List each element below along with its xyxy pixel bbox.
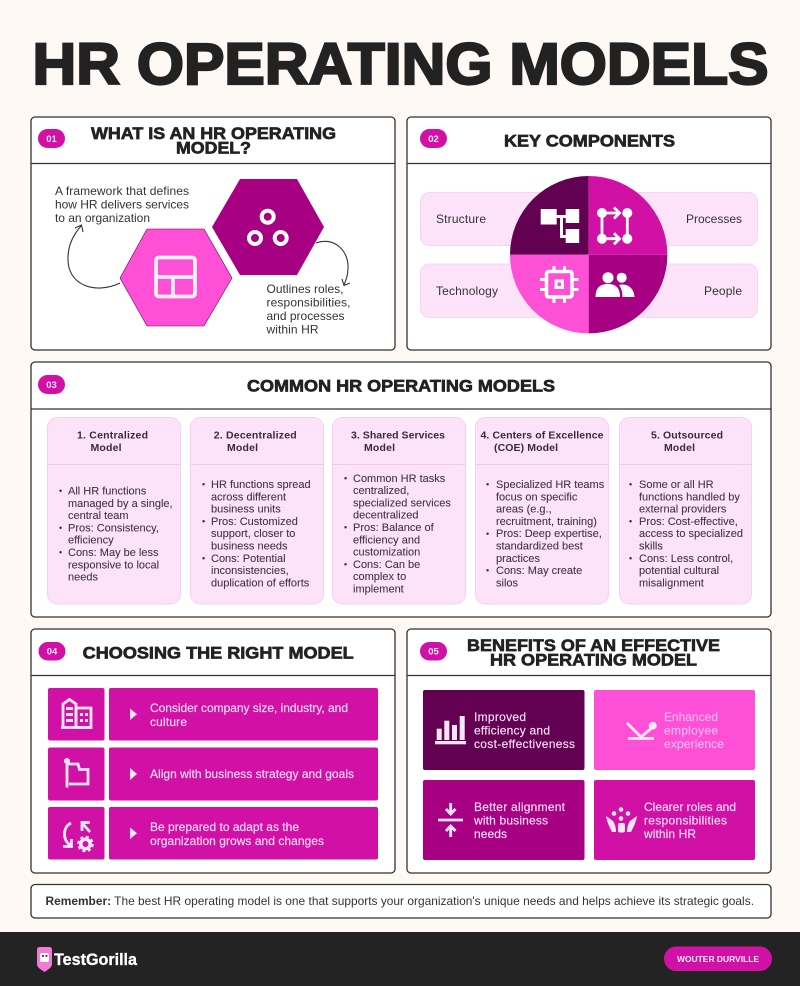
card: outsourced model: misalignment [639, 577, 704, 589]
badge 02 [420, 129, 447, 148]
card: centralized model: Pros: Consistency, [68, 522, 159, 534]
logo: TestGorilla: TestGorilla [54, 951, 138, 969]
card: outsourced model [620, 418, 752, 604]
panel: choosing the right model [31, 629, 395, 873]
text: framework definition: to an organization [55, 211, 150, 225]
tile: improved efficiency: efficiency and [474, 724, 550, 738]
icon: bar chart [435, 716, 466, 744]
footer [0, 932, 800, 986]
heading: what is an HR operating model: MODEL? [176, 140, 251, 158]
panel: benefits of an effective HR operating model [407, 629, 771, 873]
badge 04 [38, 642, 66, 660]
badge 03: 03 [46, 380, 57, 391]
card: centralized model: All HR functions [68, 486, 147, 498]
tile: enhanced employee experience [594, 690, 755, 770]
row: be prepared to adapt: organization grows and changes [150, 834, 324, 848]
card: decentralized model: Pros: Customized [211, 516, 298, 528]
card: centers of excellence model: 4. Centers of Excellence [480, 430, 604, 442]
row: be prepared to adapt: Be prepared to adapt as the [150, 820, 299, 834]
tile: enhanced employee experience: experience [664, 737, 724, 751]
card: centers of excellence model: areas (e.g., [496, 504, 552, 516]
card: decentralized model: across different [211, 491, 286, 503]
card: centralized model: responsive to local [68, 559, 159, 571]
card: centers of excellence model: practices [496, 553, 541, 565]
tile: better alignment: needs [474, 827, 507, 841]
heading: benefits: BENEFITS OF AN EFFECTIVE [467, 637, 720, 655]
card: centers of excellence model: recruitment, training) [496, 516, 597, 528]
card: decentralized model: Cons: Potential [211, 553, 286, 565]
panel: common HR operating models [31, 362, 771, 617]
card: centers of excellence model: • [486, 566, 489, 576]
heading: what is an HR operating model [91, 125, 336, 158]
panel: key components [407, 117, 771, 350]
row: business strategy [109, 748, 378, 800]
card: decentralized model [190, 418, 324, 604]
badge 01 [38, 129, 65, 148]
text: framework definition: how HR delivers services [55, 198, 189, 212]
tile: better alignment: with business [473, 814, 548, 828]
card: shared services model: Common HR tasks [353, 473, 446, 485]
card: shared services model: • [344, 523, 347, 533]
card: outsourced model: access to specialized [639, 528, 743, 540]
card: decentralized model: • [202, 480, 205, 490]
card: shared services model: Cons: Can be [353, 559, 420, 571]
panel: what is an HR operating model [31, 117, 395, 350]
heading: benefits [467, 637, 720, 670]
card: centers of excellence model: (COE) Model [494, 442, 558, 454]
card: shared services model: implement [353, 584, 404, 596]
card: centers of excellence model: • [486, 529, 489, 539]
card: outsourced model: potential cultural [639, 565, 719, 577]
pie: four quadrants [510, 176, 667, 333]
card: shared services model: customization [353, 547, 420, 559]
card: decentralized model: business units [211, 504, 281, 516]
text: framework definition [55, 184, 189, 225]
icon: alignment arrows [438, 803, 463, 837]
card: outsourced model: external providers [639, 504, 727, 516]
tile: enhanced employee experience: employee [664, 724, 718, 738]
icon: chip [540, 266, 578, 303]
arrow: to framework text [68, 225, 120, 288]
card: outsourced model: Some or all HR [639, 479, 714, 491]
card: decentralized model: • [202, 553, 205, 563]
badge 04: 04 [47, 646, 58, 658]
card: decentralized model: duplication of efforts [211, 577, 310, 589]
tile: enhanced employee experience: Enhanced [664, 710, 718, 724]
card: shared services model [332, 418, 466, 604]
row: be prepared to adapt [109, 807, 378, 860]
heading: choosing the right model: CHOOSING THE RIGHT MODEL [83, 644, 354, 662]
icon: dark hexagon with three circles [212, 179, 324, 275]
card: outsourced model: • [629, 516, 632, 526]
card: centralized model: needs [68, 572, 98, 584]
card: decentralized model: HR functions spread [211, 479, 311, 491]
card: outsourced model: skills [639, 540, 663, 552]
pill: technology and people: People [704, 284, 742, 298]
card: outsourced model: Model [664, 442, 695, 454]
heading: key components: KEY COMPONENTS [504, 132, 675, 150]
card: centralized model: • [59, 486, 62, 496]
pill: structure and processes: Structure [436, 212, 486, 226]
icon: people [596, 272, 634, 297]
card: centralized model: • [59, 523, 62, 533]
text: outlines roles: Outlines roles, [266, 282, 344, 296]
card: outsourced model: • [629, 480, 632, 490]
icon: processes [598, 208, 632, 244]
card: centers of excellence model: Pros: Deep expertise, [496, 528, 602, 540]
tile: improved efficiency: cost-effectiveness [474, 737, 575, 751]
card: shared services model: • [344, 473, 347, 483]
card: shared services model: • [344, 560, 347, 570]
card: outsourced model: 5. Outsourced [651, 430, 723, 442]
card: shared services model: 3. Shared Services [351, 430, 445, 442]
card: centralized model: Model [90, 442, 122, 454]
card: centralized model: managed by a single, [68, 498, 173, 510]
card: decentralized model: business needs [211, 540, 288, 552]
badge 05 [420, 642, 447, 660]
icon: structure [541, 209, 579, 243]
tile: clearer roles: Clearer roles and [644, 800, 736, 814]
card: shared services model: decentralized [353, 510, 418, 522]
badge 01: 01 [46, 134, 57, 145]
text: outlines roles: and processes [266, 309, 344, 323]
tile: improved efficiency [423, 690, 584, 770]
card: centralized model: Cons: May be less [68, 547, 159, 559]
row: company size [109, 688, 378, 740]
pill: author [664, 946, 772, 971]
card: centers of excellence model: focus on specific [496, 491, 578, 503]
card: decentralized model: support, closer to [211, 528, 295, 540]
card: decentralized model: inconsistencies, [211, 565, 289, 577]
tile: clearer roles [594, 780, 755, 860]
icon: hands and people [606, 807, 637, 832]
card: shared services model: Model [364, 442, 395, 454]
card: outsourced model: • [629, 553, 632, 563]
pill: technology and people: Technology [436, 284, 498, 298]
text: framework definition: A framework that defines [55, 184, 189, 198]
tile: better alignment [423, 780, 584, 860]
callout: remember: Remember: The best HR operating model is one that supports your organization's unique needs and helps achieve its strategic goals. [46, 894, 754, 908]
badge 03 [38, 375, 65, 394]
card: centralized model: • [59, 548, 62, 558]
card: decentralized model: • [202, 516, 205, 526]
card: centralized model [48, 418, 180, 604]
tile: better alignment: Better alignment [474, 800, 566, 814]
icon: pink hexagon with layout [120, 229, 232, 326]
card: centralized model: central team [68, 510, 129, 522]
card: shared services model: specialized services [353, 497, 451, 509]
row: company size: Consider company size, industry, and [150, 701, 348, 715]
card: shared services model: complex to [353, 571, 406, 583]
tile: clearer roles: within HR [643, 827, 696, 841]
callout: remember [31, 884, 771, 918]
card: decentralized model: 2. Decentralized [214, 430, 297, 442]
card: decentralized model: Model [227, 442, 258, 454]
badge 05: 05 [428, 646, 439, 658]
tile: improved efficiency: Improved [474, 710, 526, 724]
card: centers of excellence model: Cons: May create [496, 565, 582, 577]
card: shared services model: Pros: Balance of [353, 522, 435, 534]
tile: clearer roles: responsibilities [644, 814, 727, 828]
icon: adapt [48, 807, 104, 860]
card: shared services model: centralized, [353, 485, 409, 497]
text: outlines roles: within HR [266, 322, 319, 336]
text: outlines roles [266, 282, 350, 336]
card: centers of excellence model: • [486, 480, 489, 490]
icon: dial [627, 723, 654, 738]
pill: structure and processes: Processes [686, 212, 742, 226]
heading: common HR operating models: COMMON HR OPERATING MODELS [247, 378, 555, 396]
card: outsourced model: functions handled by [639, 491, 740, 503]
heading: benefits: HR OPERATING MODEL [490, 652, 697, 670]
card: centers of excellence model [476, 418, 608, 604]
icon: flag [48, 748, 104, 800]
pill: structure and processes [420, 192, 758, 246]
row: company size: culture [150, 715, 187, 729]
pill: author: WOUTER DURVILLE [677, 954, 759, 964]
card: centers of excellence model: silos [496, 577, 519, 589]
card: shared services model: efficiency and [353, 534, 420, 546]
card: outsourced model: Pros: Cost-effective, [639, 516, 738, 528]
row: business strategy: Align with business strategy and goals [150, 767, 354, 781]
card: centralized model: efficiency [68, 535, 114, 547]
arrow: to roles text [316, 241, 350, 286]
badge 02: 02 [428, 134, 439, 145]
logo: TestGorilla [37, 947, 138, 972]
title: HR OPERATING MODELS [32, 32, 768, 97]
text: outlines roles: responsibilities, [266, 296, 350, 310]
card: centers of excellence model: Specialized HR teams [496, 479, 605, 491]
pill: technology and people [420, 264, 758, 318]
card: centers of excellence model: standardized best [496, 540, 583, 552]
icon: building [48, 688, 104, 740]
card: centralized model: 1. Centralized [77, 430, 148, 442]
card: outsourced model: Cons: Less control, [639, 553, 733, 565]
heading: what is an HR operating model: WHAT IS AN HR OPERATING [91, 125, 336, 143]
